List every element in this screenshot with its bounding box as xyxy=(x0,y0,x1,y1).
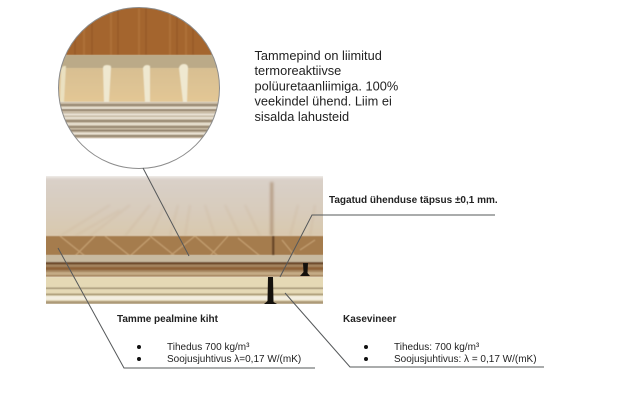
text block: glue description: sisalda lahusteid xyxy=(254,109,349,124)
tongue and lamella dark layers xyxy=(40,255,330,277)
list: birch properties: Soojusjuhtivus: λ = 0,17 W/(mK) xyxy=(394,354,537,365)
adhesive band in circle xyxy=(62,54,216,68)
oak cross-section layer xyxy=(40,236,330,256)
panel: floorboard photo xyxy=(40,174,330,304)
text block: glue description: Tammepind on liimitud xyxy=(254,48,382,63)
birch plywood layers xyxy=(40,277,330,304)
heading: birch veneer: Kasevineer xyxy=(343,314,396,325)
birch plywood layers in circle xyxy=(60,102,218,138)
heading: oak top layer: Tamme pealmine kiht xyxy=(117,314,219,325)
list: oak properties: Tihedus 700 kg/m³ xyxy=(167,342,250,353)
lamella strips in circle xyxy=(50,64,230,102)
list: oak properties: Soojusjuhtivus λ=0,17 W/(mK) xyxy=(167,354,301,365)
text block: glue description: veekindel ühend. Liim ei xyxy=(254,94,392,108)
list: oak properties xyxy=(137,342,301,365)
board top surface xyxy=(40,174,330,237)
text block: glue description: polüuretaanliimiga. 100% xyxy=(254,78,398,94)
list: birch properties: Tihedus: 700 kg/m³ xyxy=(394,342,480,353)
leader line: circle to adhesive joint xyxy=(143,168,189,256)
leader line: oak top layer xyxy=(58,248,315,368)
oak top layer in circle xyxy=(66,8,212,56)
list: birch properties xyxy=(364,342,537,365)
leader line: joint precision xyxy=(280,215,495,277)
heading: joint precision: Tagatud ühenduse täpsus ±0,1 mm. xyxy=(329,195,498,206)
panel: magnified circle of the glued joint xyxy=(58,7,220,169)
leader line: birch veneer xyxy=(285,293,544,367)
text block: glue description: termoreaktiivse xyxy=(254,63,341,78)
black joint gap xyxy=(264,277,277,304)
